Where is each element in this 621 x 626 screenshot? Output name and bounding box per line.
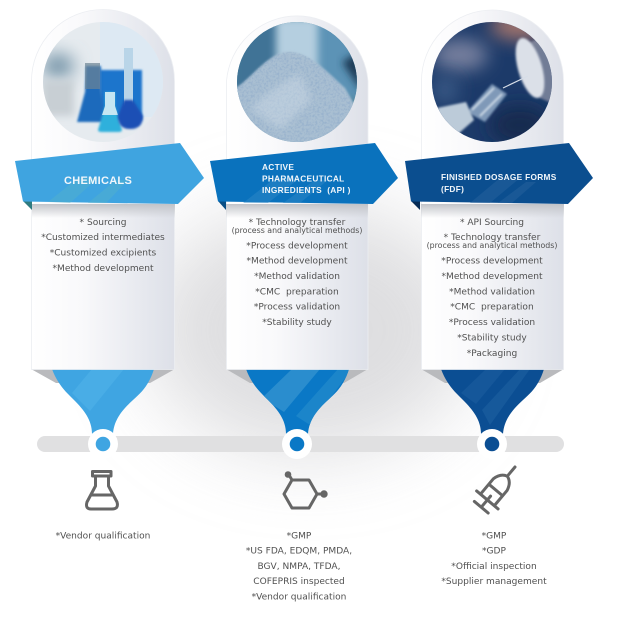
text: fdf qualifications: *GDP [482, 546, 507, 556]
timeline node: api [282, 429, 312, 459]
heading: api [262, 162, 351, 195]
text: fdf services: * API Sourcing [460, 218, 524, 228]
heading: fdf [441, 172, 557, 194]
panel: fdf [405, 10, 593, 435]
card: chemicals [32, 9, 174, 369]
text: fdf qualifications: *Official inspection [451, 562, 537, 572]
heading: chemicals: CHEMICALS [64, 175, 132, 187]
text: chemicals qualifications: *Vendor qualification [56, 532, 150, 542]
heading: api: PHARMACEUTICAL [262, 174, 345, 184]
photo: syringe and vial [432, 22, 552, 142]
funnel: api [226, 369, 368, 435]
background shadow [145, 205, 475, 455]
text: api qualifications: *US FDA, EDQM, PMDA, [246, 546, 352, 556]
panel: chemicals [15, 9, 204, 435]
text: api services: *Process validation [254, 302, 340, 312]
panel: api [210, 16, 398, 435]
text: api services: *Process development [246, 242, 348, 252]
text: fdf services: *Method development [441, 272, 543, 282]
text: api services: *Stability study [262, 318, 332, 328]
text: fdf services: *CMC preparation [450, 302, 534, 312]
text: fdf services: * Technology transfer [444, 233, 541, 243]
text: api qualifications: *Vendor qualification [252, 592, 346, 602]
text: fdf services: (process and analytical methods) [427, 241, 557, 250]
funnel: chemicals [31, 369, 175, 435]
ribbon: chemicals [15, 143, 204, 218]
text: chemicals services: *Customized excipients [50, 248, 157, 258]
text: api services: *CMC preparation [255, 288, 339, 298]
text: api services: *Method development [246, 256, 348, 266]
text: fdf services: *Process validation [449, 318, 535, 328]
heading: fdf: FINISHED DOSAGE FORMS [441, 172, 557, 182]
text: chemicals services [41, 218, 165, 274]
text: api qualifications: BGV, NMPA, TFDA, [258, 562, 340, 572]
text: fdf services: *Packaging [467, 349, 517, 359]
text: api qualifications [246, 532, 352, 602]
heading: api: INGREDIENTS (API ) [262, 185, 351, 195]
ribbon: api [210, 143, 398, 218]
text: api qualifications: *GMP [287, 532, 312, 542]
text: fdf services: *Stability study [457, 334, 527, 344]
text: fdf services: *Method validation [449, 288, 535, 298]
text: api qualifications: COFEPRIS inspected [253, 577, 345, 587]
text: api services: (process and analytical methods) [232, 226, 362, 235]
icon: flask [86, 472, 117, 509]
card: fdf [422, 10, 564, 369]
text: api services: *Method validation [254, 272, 340, 282]
text: fdf services: *Process development [441, 256, 543, 266]
icon: molecule [284, 471, 328, 508]
text: fdf services [427, 218, 557, 359]
photo: powder pile [237, 22, 357, 142]
photo: laboratory glassware [42, 22, 164, 144]
text: chemicals services: *Method development [52, 264, 154, 274]
text: api services: * Technology transfer [249, 218, 346, 228]
text: chemicals services: * Sourcing [80, 218, 126, 228]
funnel: fdf [421, 369, 564, 435]
timeline node: chemicals [88, 429, 118, 459]
text: fdf qualifications: *GMP [482, 532, 507, 542]
timeline bar [37, 429, 564, 459]
text: chemicals services: *Customized intermediates [41, 233, 165, 243]
heading: api: ACTIVE [262, 162, 294, 172]
timeline node: fdf [477, 429, 507, 459]
ribbon: fdf [405, 143, 593, 218]
icon: syringe [471, 458, 526, 516]
text: fdf qualifications: *Supplier management [441, 577, 547, 587]
heading: fdf: (FDF) [441, 184, 464, 194]
text: api services [232, 218, 362, 328]
text: fdf qualifications [441, 532, 547, 587]
card: api [226, 16, 368, 369]
